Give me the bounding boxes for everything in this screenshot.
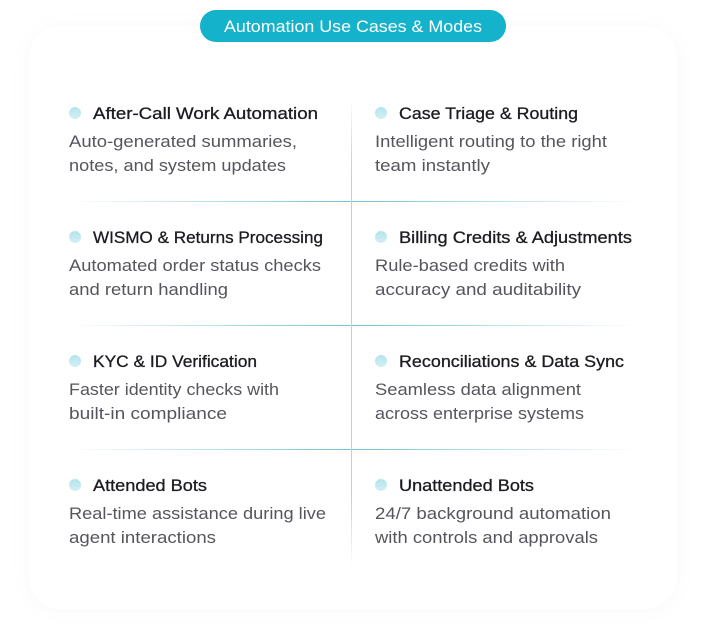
item: Reconciliations & Data Sync: across enterprise systems [375,404,584,423]
item: Case Triage & Routing [375,104,607,175]
item: Unattended Bots: Unattended Bots [399,476,534,495]
heading pill: Automation Use Cases & Modes [224,17,482,36]
item: Attended Bots [69,476,326,547]
item: Reconciliations & Data Sync [375,352,625,423]
item: Billing Credits & Adjustments: Billing Credits & Adjustments [399,228,632,247]
item: KYC & ID Verification: KYC & ID Verification [93,352,257,371]
item: Case Triage & Routing: Intelligent routing to the right [375,132,607,151]
item: After-Call Work Automation: After-Call Work Automation [93,104,318,123]
item: After-Call Work Automation: notes, and system updates [69,156,286,175]
item: Reconciliations & Data Sync: Seamless data alignment [375,380,581,399]
item: Unattended Bots [374,476,611,547]
item: WISMO & Returns Processing: WISMO & Returns Processing [93,228,323,247]
item: Case Triage & Routing: team instantly [375,156,491,175]
item: Reconciliations & Data Sync: Reconciliations & Data Sync [399,352,625,371]
item: KYC & ID Verification: built-in compliance [69,404,227,423]
item: After-Call Work Automation [69,104,318,175]
item: Billing Credits & Adjustments [375,228,632,299]
item: Attended Bots: Real-time assistance during live [69,504,326,523]
item: KYC & ID Verification [69,352,279,423]
item: WISMO & Returns Processing: and return handling [69,280,228,299]
heading pill [200,10,506,42]
item: Billing Credits & Adjustments: accuracy and auditability [375,280,582,299]
item: WISMO & Returns Processing: Automated order status checks [69,256,321,275]
item: KYC & ID Verification: Faster identity checks with [69,380,279,399]
item: After-Call Work Automation: Auto-generated summaries, [69,132,297,151]
item: Billing Credits & Adjustments: Rule-based credits with [375,256,565,275]
item: Unattended Bots: 24/7 background automation [375,504,611,523]
item: Case Triage & Routing: Case Triage & Routing [399,104,578,123]
item: Unattended Bots: with controls and approvals [374,528,598,547]
item: Attended Bots: agent interactions [69,528,216,547]
item: WISMO & Returns Processing [69,228,323,299]
grid dividers [69,100,637,566]
item: Attended Bots: Attended Bots [93,476,207,495]
